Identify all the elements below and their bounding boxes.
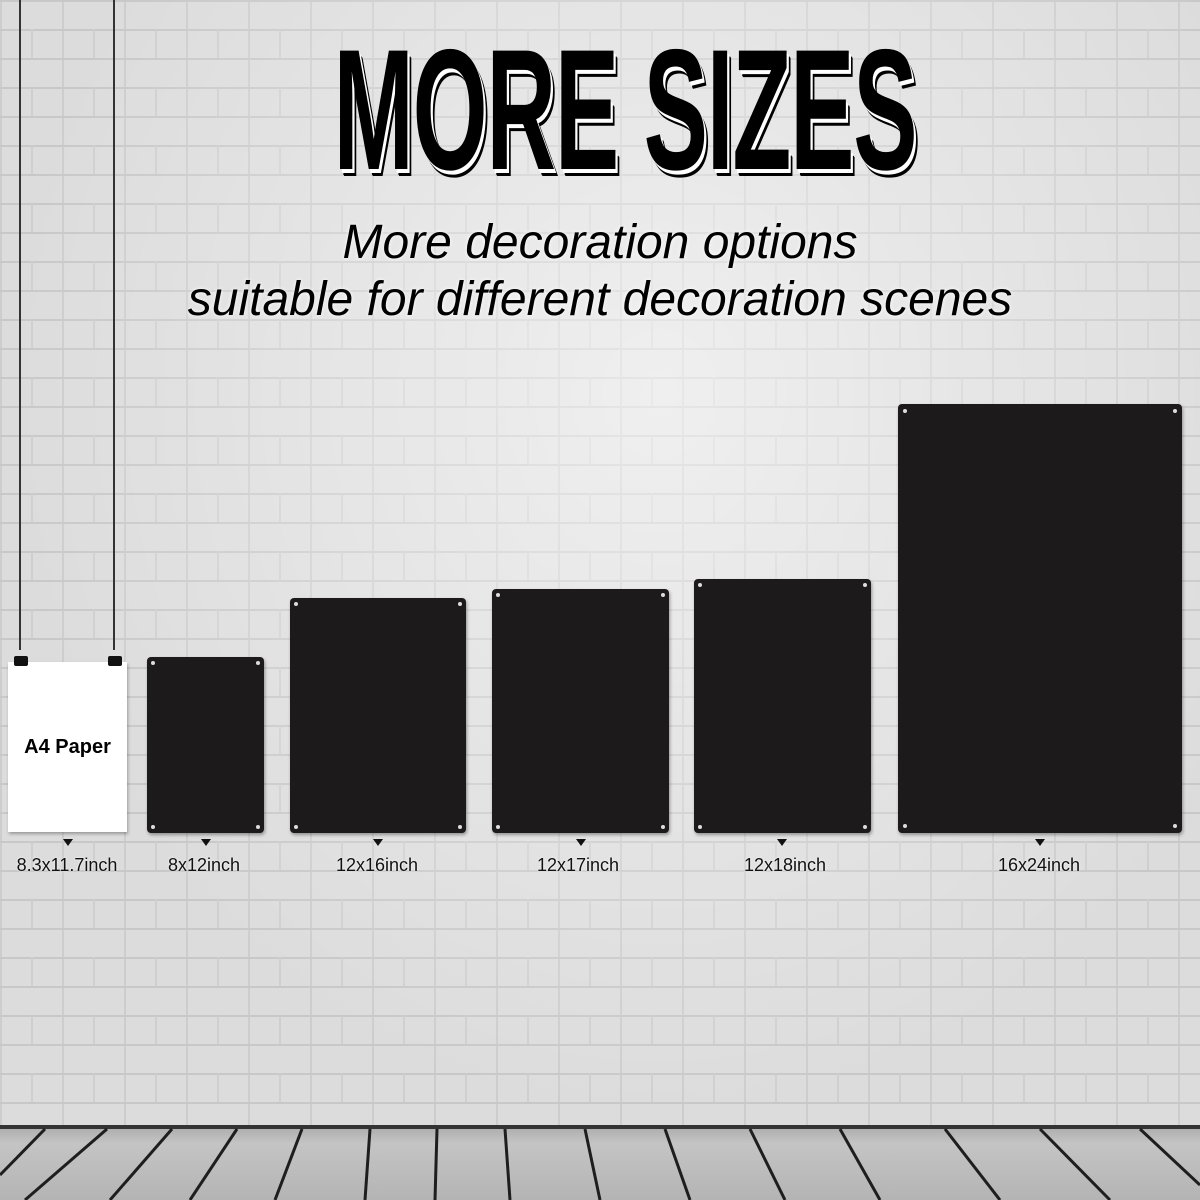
size labels: 12x18inch [744, 855, 826, 875]
size labels: 8.3x11.7inch [17, 855, 117, 875]
floor [0, 1125, 1200, 1200]
size labels: 12x16inch [336, 855, 418, 875]
panel 12x17 [492, 589, 669, 833]
size labels: 16x24inch [998, 855, 1080, 875]
title: MORE SIZES [334, 14, 916, 206]
A4 paper: A4 Paper [24, 736, 111, 758]
subtitle: suitable for different decoration scenes [188, 273, 1012, 326]
size labels [17, 855, 1080, 875]
size markers [63, 839, 1045, 846]
subtitle: More decoration options [343, 216, 857, 269]
hanging strings [19, 0, 21, 650]
size labels: 12x17inch [537, 855, 619, 875]
panel 12x16 [290, 598, 466, 833]
panel 12x18 [694, 579, 871, 833]
A4 paper [8, 662, 127, 832]
panel 16x24 [898, 404, 1182, 833]
size labels: 8x12inch [168, 855, 240, 875]
subtitle [188, 216, 1012, 326]
panel 8x12 [147, 657, 264, 833]
